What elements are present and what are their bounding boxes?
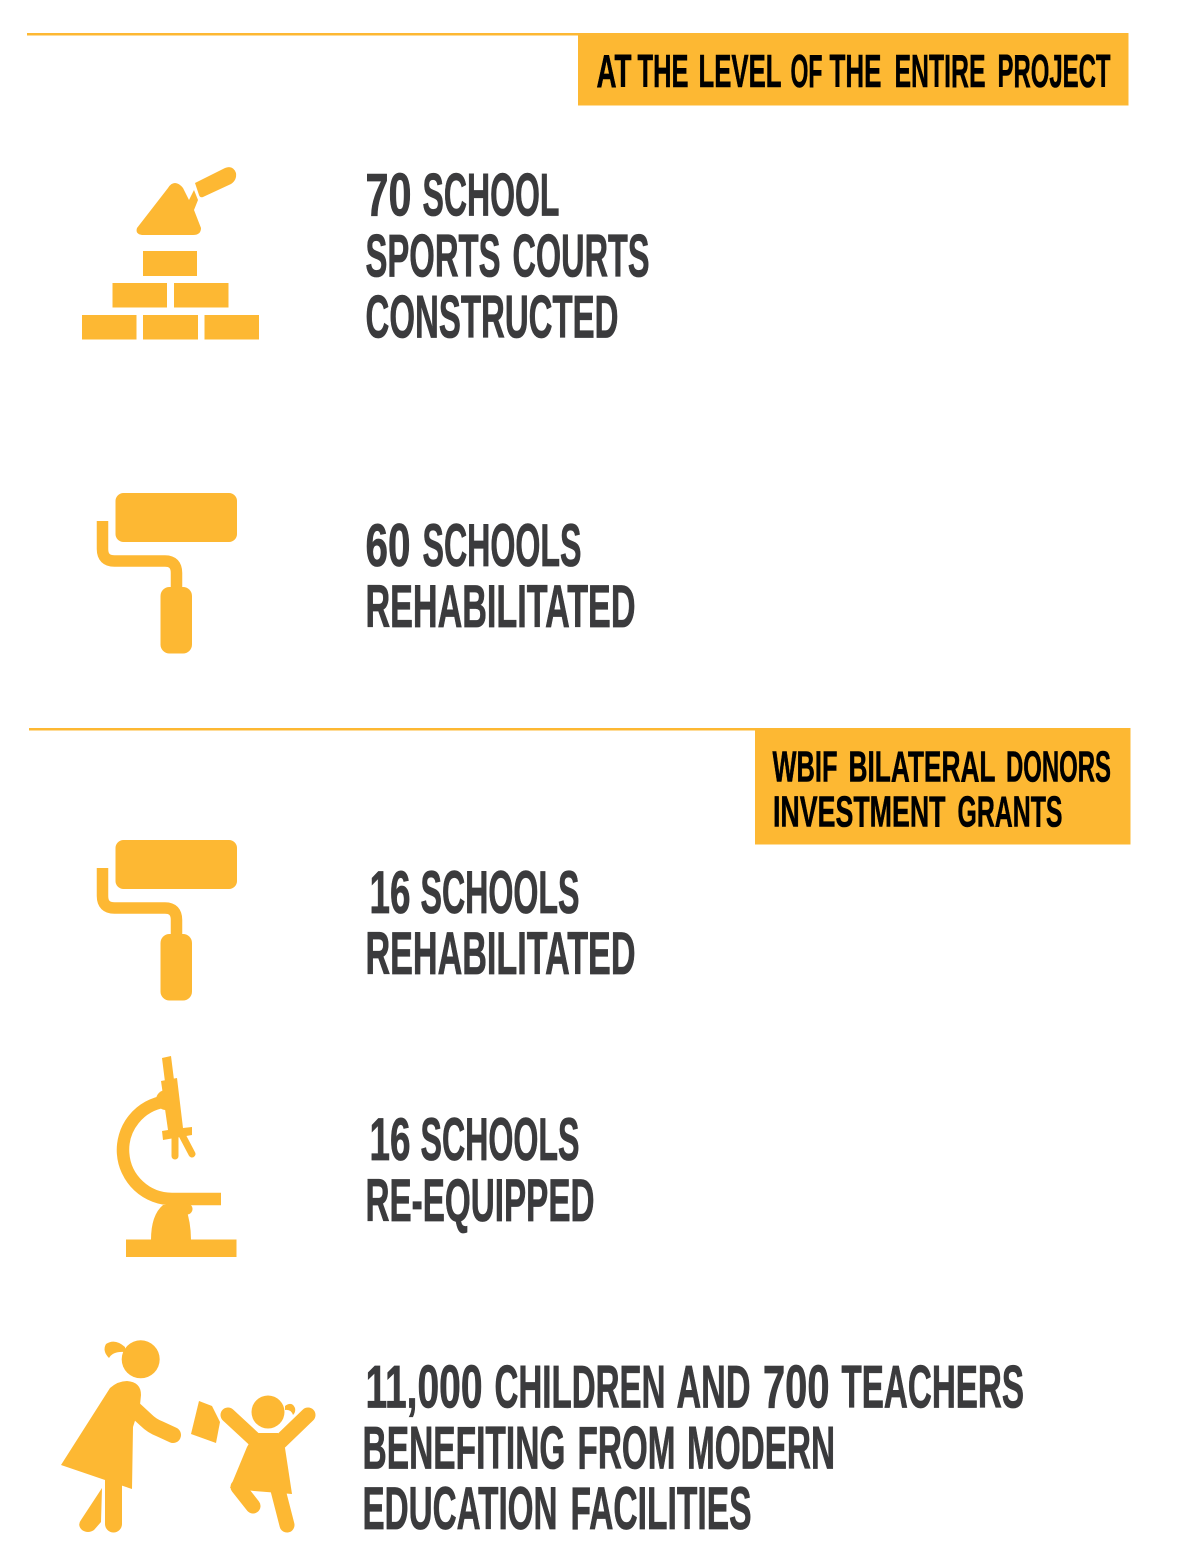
section header: entire project: OF	[790, 45, 822, 97]
section header: entire project: ENTIRE	[894, 45, 986, 97]
section header: WBIF bilateral donors investment grants: BILATERAL	[848, 744, 996, 792]
text: 16 schools re-equipped: RE-EQUIPPED	[366, 1167, 594, 1234]
text: 11,000 children and 700 teachers: TEACHERS	[842, 1353, 1024, 1420]
text: 11,000 children and 700 teachers: AND	[676, 1353, 750, 1420]
icon: paint roller	[102, 493, 237, 654]
text: 70 school sports courts constructed: COURTS	[512, 223, 650, 290]
icon: trowel and bricks	[82, 167, 259, 340]
text: 70 school sports courts constructed: 70	[366, 162, 412, 229]
text: 60 schools rehabilitated: SCHOOLS	[422, 512, 582, 579]
text: 16 schools rehabilitated: 16	[370, 859, 410, 926]
text: 16 schools rehabilitated	[366, 859, 636, 987]
text: 16 schools rehabilitated: SCHOOLS	[420, 859, 580, 926]
text: 16 schools re-equipped: SCHOOLS	[420, 1106, 580, 1173]
text: 11,000 children and 700 teachers: MODERN	[687, 1414, 835, 1481]
text: 11,000 children and 700 teachers	[362, 1353, 1024, 1542]
icon: paint roller	[102, 840, 237, 1000]
text: 11,000 children and 700 teachers: 11,000	[366, 1353, 482, 1420]
text: 11,000 children and 700 teachers: FROM	[578, 1414, 676, 1481]
text: 16 schools re-equipped: 16	[370, 1106, 410, 1173]
text: 16 schools re-equipped	[366, 1106, 594, 1234]
text: 60 schools rehabilitated: 60	[366, 512, 410, 579]
text: 16 schools rehabilitated: REHABILITATED	[366, 920, 636, 987]
text: 70 school sports courts constructed: SCHOOL	[422, 162, 560, 229]
text: 11,000 children and 700 teachers: CHILDREN	[494, 1353, 666, 1420]
section header: WBIF bilateral donors investment grants	[29, 728, 1130, 844]
section header: entire project: THE	[830, 45, 882, 97]
text: 70 school sports courts constructed: SPORTS	[366, 223, 500, 290]
text: 11,000 children and 700 teachers: EDUCATION	[362, 1475, 558, 1542]
section header: WBIF bilateral donors investment grants: WBIF	[772, 744, 838, 792]
section header: WBIF bilateral donors investment grants: INVESTMENT	[773, 789, 946, 837]
text: 11,000 children and 700 teachers: 700	[763, 1353, 830, 1420]
text: 70 school sports courts constructed: CONSTRUCTED	[366, 284, 618, 350]
text: 60 schools rehabilitated: REHABILITATED	[366, 573, 636, 640]
text: 11,000 children and 700 teachers: FACILITIES	[570, 1475, 752, 1542]
text: 11,000 children and 700 teachers: BENEFITING	[362, 1414, 566, 1481]
text: 60 schools rehabilitated	[366, 512, 636, 640]
section header: entire project: AT	[596, 45, 632, 97]
text: 70 school sports courts constructed	[366, 162, 650, 350]
icon: microscope	[123, 1056, 236, 1257]
section header: entire project: LEVEL	[698, 45, 782, 97]
section header: WBIF bilateral donors investment grants: GRANTS	[958, 789, 1062, 837]
icon: teacher and child with book	[61, 1340, 308, 1532]
section header: WBIF bilateral donors investment grants: DONORS	[1006, 744, 1111, 792]
section header: entire project	[27, 33, 1128, 106]
section header: entire project: THE	[638, 45, 688, 97]
